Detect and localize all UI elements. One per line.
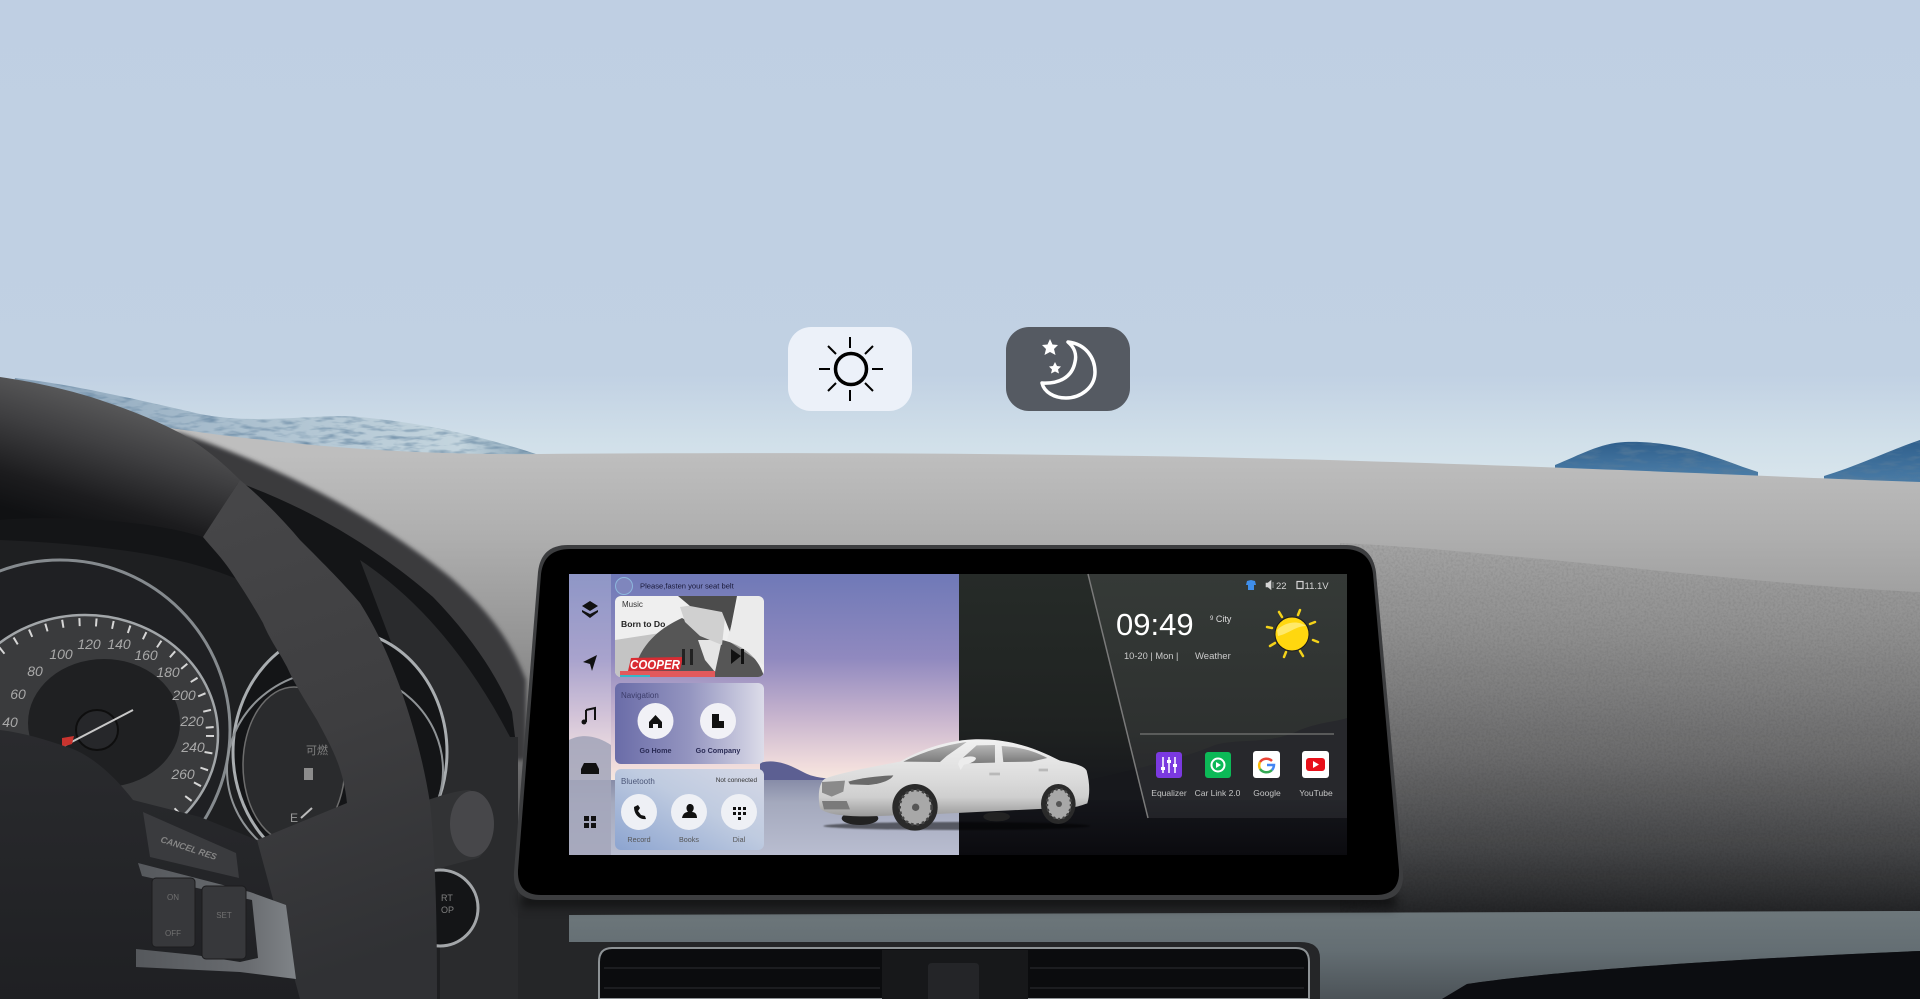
gauge numbers: 80 — [27, 663, 43, 679]
windows — [903, 742, 967, 762]
icon: company building — [712, 714, 724, 728]
icon: blue shirt — [1246, 580, 1256, 590]
screen: night mode half: 10-20 | Mon | — [1124, 651, 1178, 661]
cruise buttons — [143, 812, 246, 959]
sidebar — [569, 574, 611, 855]
app: youtube: YouTube — [1299, 788, 1333, 798]
app: equalizer: Equalizer — [1151, 788, 1187, 798]
gauge numbers: 120 — [77, 636, 101, 652]
front wheel — [892, 784, 938, 831]
pause button — [682, 649, 693, 665]
distant mountain — [760, 761, 840, 782]
music card — [615, 596, 764, 677]
mountains right — [1555, 440, 1920, 490]
music card: Born to Do — [621, 619, 665, 629]
white car straddling the screen — [819, 739, 1090, 831]
wheel hub and spoke — [0, 730, 300, 999]
air vent — [599, 948, 1309, 999]
cruise buttons: CANCEL RES — [159, 834, 218, 862]
screen: night mode half: 9 — [1210, 616, 1214, 622]
instrument hood and cluster recess — [0, 433, 526, 999]
icon: app grid — [584, 816, 596, 828]
lower right dark panel — [1442, 951, 1920, 999]
screen: day mode half — [569, 574, 959, 855]
app: equalizer — [1151, 752, 1187, 798]
screen: night mode half: Weather — [1195, 651, 1231, 662]
icon: music note — [586, 708, 595, 722]
icon: battery — [1297, 582, 1303, 588]
music card: COOPER — [630, 658, 680, 672]
bluetooth card: Not connected — [716, 777, 757, 784]
bluetooth card: Dial — [733, 835, 746, 844]
icon: dial pad — [733, 807, 746, 820]
music card: Music — [622, 600, 643, 609]
clock: 09:49 — [1116, 607, 1194, 642]
dashboard top surface — [0, 425, 1920, 999]
app: car link — [1195, 752, 1241, 798]
next button — [731, 649, 744, 664]
fuel gauge — [227, 630, 447, 874]
icon: navigation arrow — [583, 655, 597, 671]
album logo — [628, 657, 683, 671]
bluetooth card — [615, 769, 764, 850]
gauge numbers: 160 — [134, 647, 158, 663]
mountains left — [0, 378, 542, 460]
navigation card: Navigation — [621, 691, 659, 700]
gauge numbers — [2, 636, 205, 782]
fuel gauge: E — [290, 811, 298, 825]
grille — [822, 781, 845, 797]
icon: home — [649, 715, 662, 728]
dark hills — [1090, 718, 1347, 800]
stalk lever — [428, 790, 494, 870]
gauge numbers: 100 — [49, 646, 73, 662]
far wheel — [842, 812, 878, 825]
gauge numbers: 140 — [107, 636, 131, 652]
assistant status: Please,fasten your seat belt — [640, 582, 735, 590]
steering wheel — [0, 377, 437, 999]
day mode button — [788, 327, 912, 411]
gauge numbers: 240 — [180, 739, 205, 755]
silver trim — [136, 863, 296, 979]
door handles — [989, 769, 1048, 775]
app: car link: Car Link 2.0 — [1195, 788, 1241, 798]
navigation card: Go Company — [696, 746, 740, 755]
status bar: 11.1V — [1304, 581, 1329, 592]
bluetooth card: Record — [627, 835, 651, 844]
monitor bezel — [514, 545, 1403, 900]
icon: weather sun — [1267, 610, 1318, 657]
cruise buttons: SET — [216, 911, 232, 920]
status bar: 22 — [1276, 581, 1287, 592]
icon: sun — [819, 337, 883, 401]
gauge numbers: 260 — [170, 766, 195, 782]
gauge numbers: 60 — [10, 686, 26, 702]
cruise buttons: OFF — [165, 929, 181, 938]
start stop button: RT — [441, 893, 453, 903]
lower trim strip — [569, 911, 1920, 999]
icon: layers — [582, 601, 598, 618]
mirror — [958, 756, 976, 770]
screen: night mode half: City — [1213, 614, 1232, 624]
gauge numbers: 40 — [2, 714, 18, 730]
navigation card: Go Home — [640, 746, 671, 755]
assistant status — [616, 578, 735, 594]
bluetooth card: Books — [679, 835, 699, 844]
start stop button: OP — [441, 905, 454, 915]
divider — [1140, 733, 1334, 735]
gauge numbers: 200 — [171, 687, 196, 703]
cruise buttons: ON — [167, 893, 179, 902]
navigation card — [615, 683, 764, 764]
start stop button — [402, 870, 478, 946]
fuel gauge: 可燃 — [306, 743, 328, 757]
icon: crescent moon and stars — [1042, 339, 1095, 398]
wheel rim side section — [203, 480, 437, 999]
infographic scene: car dashboard with day and night screen — [0, 327, 1920, 999]
bluetooth card: Bluetooth — [621, 777, 655, 786]
app: google — [1253, 751, 1281, 798]
gauge numbers: 220 — [179, 713, 204, 729]
rear wheel — [1041, 784, 1076, 824]
monitor shadow — [520, 892, 1396, 908]
night mode button — [1006, 327, 1130, 411]
speedometer gauge — [0, 560, 230, 900]
icon: car — [581, 763, 599, 774]
icon: contacts — [682, 804, 697, 818]
leather lower dashboard — [1340, 543, 1920, 915]
ground — [569, 780, 959, 855]
car body — [819, 739, 1089, 816]
screen: night mode half — [959, 574, 1347, 855]
status bar — [1246, 580, 1329, 592]
slanted info panel — [1088, 574, 1347, 818]
headlight — [848, 775, 893, 785]
wheel rim top section — [0, 377, 240, 537]
album photo — [615, 634, 657, 677]
app: google: Google — [1253, 788, 1281, 798]
app: youtube — [1299, 751, 1333, 798]
icon: speaker — [1266, 580, 1273, 590]
sky background — [0, 0, 1920, 500]
icon: phone record — [634, 805, 646, 819]
gauge numbers: 180 — [156, 664, 180, 680]
